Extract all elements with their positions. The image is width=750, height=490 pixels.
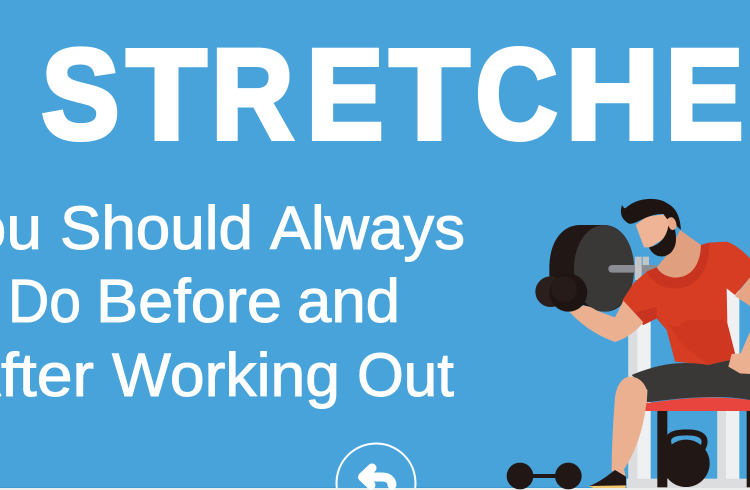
bench frame (627, 285, 750, 488)
red seat (644, 397, 750, 411)
weight plate (549, 225, 658, 312)
illustration: man lifting dumbbell on bench (535, 199, 750, 488)
ear (668, 217, 677, 230)
beard (649, 222, 676, 256)
hand on hip (728, 332, 750, 374)
title (42, 24, 744, 166)
neck (657, 230, 701, 279)
right arm (735, 277, 750, 306)
subtitle: Always (270, 194, 465, 262)
title: S (42, 24, 120, 166)
shirt (622, 242, 750, 365)
hair (621, 199, 681, 230)
icon: return arrow (362, 468, 392, 485)
back to top button (336, 443, 416, 488)
shorts (632, 360, 750, 402)
shoe (589, 470, 626, 488)
subtitle: Do (8, 267, 81, 335)
curling arm (569, 301, 643, 342)
dumbbell in hand (535, 274, 587, 312)
leg (612, 377, 647, 477)
title: C (476, 24, 558, 166)
subtitle: Out (357, 341, 454, 409)
subtitle (0, 194, 465, 409)
floor dumbbell (507, 463, 582, 489)
subtitle: Working (112, 341, 340, 409)
kettlebell (662, 432, 710, 487)
subtitle: and (297, 267, 400, 335)
title: T (126, 24, 206, 166)
subtitle: Should (60, 194, 253, 262)
title: E (306, 24, 384, 166)
title: E (666, 24, 744, 166)
title: T (390, 24, 470, 166)
face (636, 213, 675, 247)
title: R (212, 24, 294, 166)
title: H (566, 24, 660, 166)
subtitle: Before (96, 267, 282, 335)
